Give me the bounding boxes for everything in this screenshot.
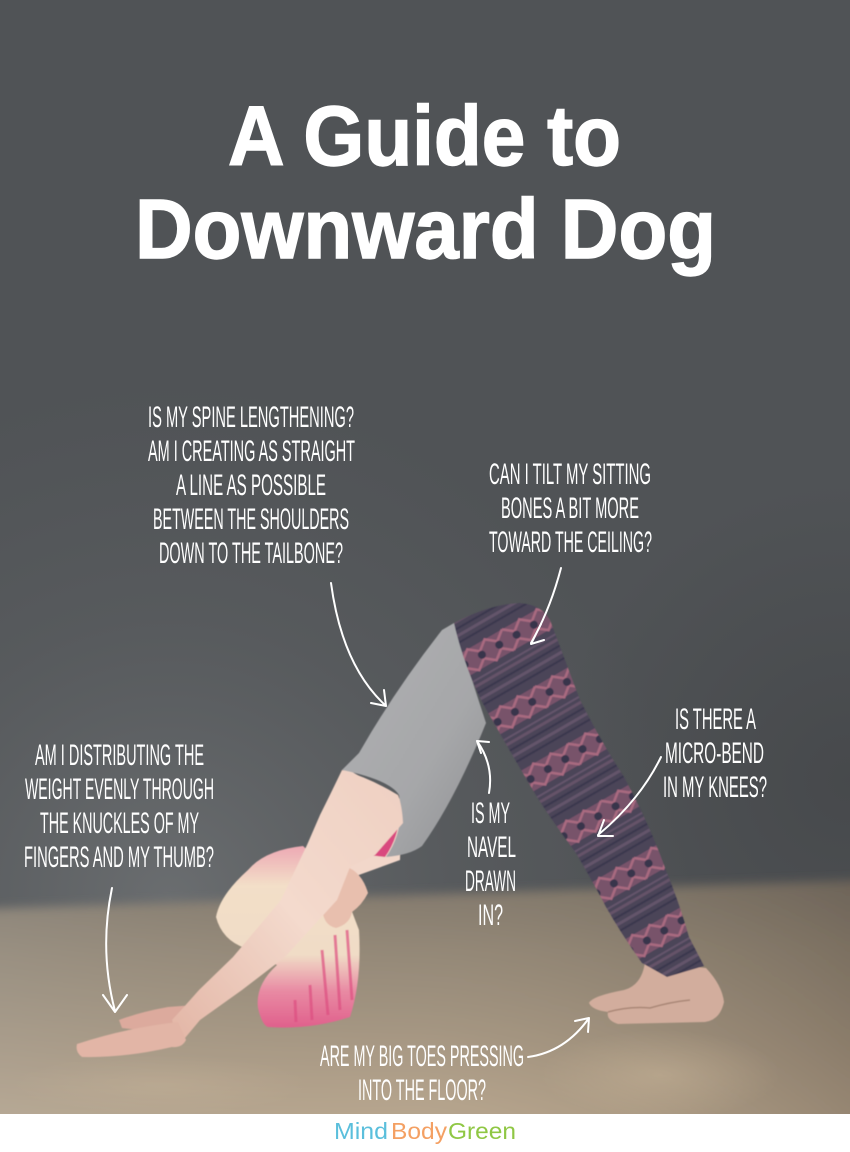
callout: knees xyxy=(663,703,767,804)
text: IS MY SPINE LENGTHENING? xyxy=(148,401,354,434)
back hand xyxy=(119,1005,195,1031)
feet xyxy=(589,962,724,1024)
pink hair strands xyxy=(295,930,352,1022)
text: CAN I TILT MY SITTING xyxy=(489,458,651,491)
callout: spine: DOWN TO THE TAILBONE? xyxy=(159,537,343,570)
arrow: spine xyxy=(331,583,386,706)
arrow: knuckles xyxy=(103,888,127,1012)
title xyxy=(135,89,716,276)
logo: MindBodyGreen: Mind xyxy=(334,1118,388,1144)
footer band xyxy=(0,1114,850,1152)
background: wooden floor xyxy=(0,880,850,1130)
callout: toes: INTO THE FLOOR? xyxy=(358,1074,486,1107)
foot toes shading xyxy=(608,1000,690,1012)
hair xyxy=(216,846,360,1028)
arrow: navel xyxy=(477,741,490,793)
face xyxy=(322,866,368,928)
text: WEIGHT EVENLY THROUGH xyxy=(25,773,214,806)
arrow: sitting bones xyxy=(531,568,561,644)
text: FINGERS AND MY THUMB? xyxy=(24,841,214,874)
text: TOWARD THE CEILING? xyxy=(489,526,652,559)
title: Downward Dog xyxy=(135,182,716,276)
leggings xyxy=(454,603,704,977)
callout: navel: NAVEL xyxy=(467,831,516,864)
logo: MindBodyGreen: Green xyxy=(448,1118,516,1144)
yoga figure in downward dog pose xyxy=(77,603,724,1057)
callout: knees: IS THERE A xyxy=(675,703,756,736)
title: A Guide to xyxy=(228,89,621,183)
text: DRAWN xyxy=(465,865,516,898)
front hand xyxy=(77,1022,186,1057)
text: BETWEEN THE SHOULDERS xyxy=(153,503,349,536)
callout: sitting bones: BONES A BIT MORE xyxy=(501,492,639,525)
logo: MindBodyGreen: Body xyxy=(391,1118,448,1144)
callout: knuckles xyxy=(24,739,214,874)
callout: navel: IS MY xyxy=(471,797,510,830)
callout: navel: IN? xyxy=(478,899,503,932)
arrow: toes xyxy=(528,1018,589,1057)
arm xyxy=(172,770,403,1044)
callout: spine xyxy=(148,401,355,570)
logo: MindBodyGreen xyxy=(334,1118,516,1144)
callout: toes xyxy=(320,1040,524,1107)
callout: navel xyxy=(465,797,516,932)
bra strap xyxy=(368,795,399,857)
text: ARE MY BIG TOES PRESSING xyxy=(320,1040,524,1073)
callout: knuckles: THE KNUCKLES OF MY xyxy=(40,807,199,840)
callout: sitting bones xyxy=(489,458,652,559)
arrow: knees xyxy=(598,757,661,836)
grey shirt xyxy=(342,623,486,857)
far side torso and bra xyxy=(318,768,402,880)
callout: knuckles: AM I DISTRIBUTING THE xyxy=(35,739,204,772)
text: AM I CREATING AS STRAIGHT xyxy=(148,435,355,468)
callout: spine: A LINE AS POSSIBLE xyxy=(176,469,326,502)
